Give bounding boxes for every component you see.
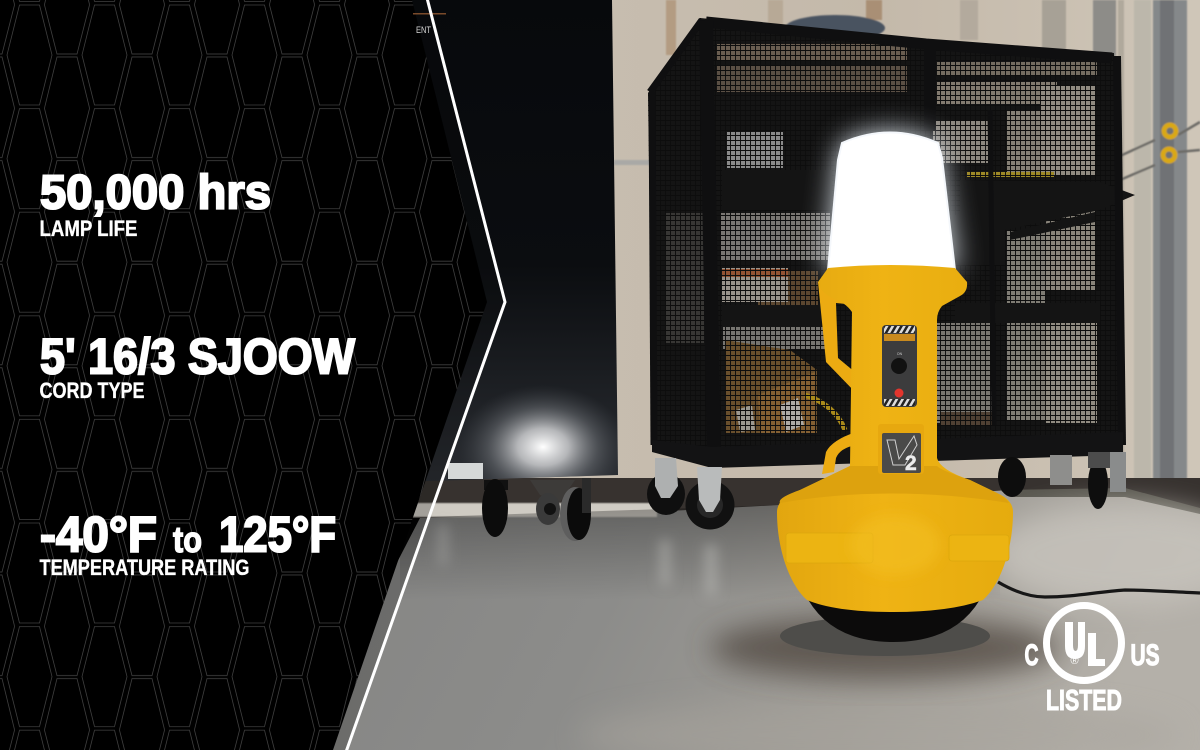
- label: TEMPERATURE RATING: [40, 555, 250, 580]
- wall studs and steel columns: [614, 0, 1200, 497]
- label: CORD TYPE: [40, 378, 144, 403]
- low temperature: -40°F: [40, 506, 157, 562]
- cage base rail: [652, 432, 1123, 468]
- wire mesh: [648, 18, 1123, 465]
- cage frame: [650, 20, 1122, 462]
- spec: cord type: [40, 328, 356, 403]
- c: C: [1024, 639, 1038, 672]
- photo background: warehouse room: [300, 0, 1200, 750]
- base highlight: [850, 515, 940, 575]
- value: 50,000 hrs: [40, 166, 271, 220]
- registered mark: ®: [1070, 655, 1079, 667]
- cabinet casters: [482, 478, 591, 541]
- yellow work light: [777, 132, 1013, 642]
- base side panels: [786, 533, 1009, 563]
- shelves: [722, 170, 1135, 327]
- cabinet body: [400, 0, 618, 482]
- power LED: [894, 388, 904, 398]
- label: LAMP LIFE: [40, 216, 138, 241]
- black specs panel: [0, 0, 487, 750]
- letter U: [1065, 622, 1085, 659]
- cabinet on casters: [400, 0, 628, 541]
- light reflection on cabinet: [468, 392, 618, 479]
- partial header fragment at top edge: [413, 13, 446, 35]
- lit areas seen through mesh: [666, 44, 1097, 433]
- floor light and shadow: [990, 505, 1200, 605]
- hexagon pattern: [0, 0, 487, 750]
- V2 badge: [878, 424, 924, 475]
- spec: lamp life: [40, 166, 271, 241]
- cage casters: [647, 452, 1126, 530]
- wire storage cage: [647, 18, 1135, 530]
- LISTED: LISTED: [1046, 685, 1122, 717]
- lamp body: [777, 265, 1013, 612]
- high temperature: 125°F: [219, 506, 336, 562]
- base shoulder shading: [780, 466, 1009, 503]
- power cord: [998, 582, 1200, 597]
- back wall: [400, 0, 1200, 500]
- cage interior: [648, 18, 1123, 465]
- partial header fragment at top edge: ENT: [416, 25, 431, 35]
- floor shade near wall: [400, 505, 1000, 600]
- black rubber base: [804, 592, 984, 642]
- lower handle: [822, 432, 856, 474]
- UL listed certification mark: [1024, 606, 1160, 717]
- letter L: [1088, 633, 1105, 666]
- switch panel: [882, 325, 917, 407]
- US: US: [1130, 639, 1160, 672]
- cabinet label: [448, 463, 483, 479]
- value: 5' 16/3 SJOOW: [40, 328, 356, 384]
- to: to: [173, 519, 202, 560]
- upper handle: [818, 282, 856, 393]
- baseboard and floor: [400, 478, 1200, 518]
- brand strip: [884, 334, 915, 341]
- V outline: [887, 436, 917, 465]
- hazard stripes: [884, 326, 915, 333]
- lit globe: [828, 132, 955, 270]
- spec: temperature rating: [40, 506, 336, 580]
- light glow: [826, 132, 957, 270]
- model number: 2: [905, 452, 917, 475]
- rocker switch: [891, 358, 907, 374]
- angled band darkening photo beside the panel: [333, 0, 505, 750]
- switch labels: ON: [897, 352, 903, 356]
- white chevron line: [346, 0, 505, 750]
- ring: [1046, 606, 1122, 680]
